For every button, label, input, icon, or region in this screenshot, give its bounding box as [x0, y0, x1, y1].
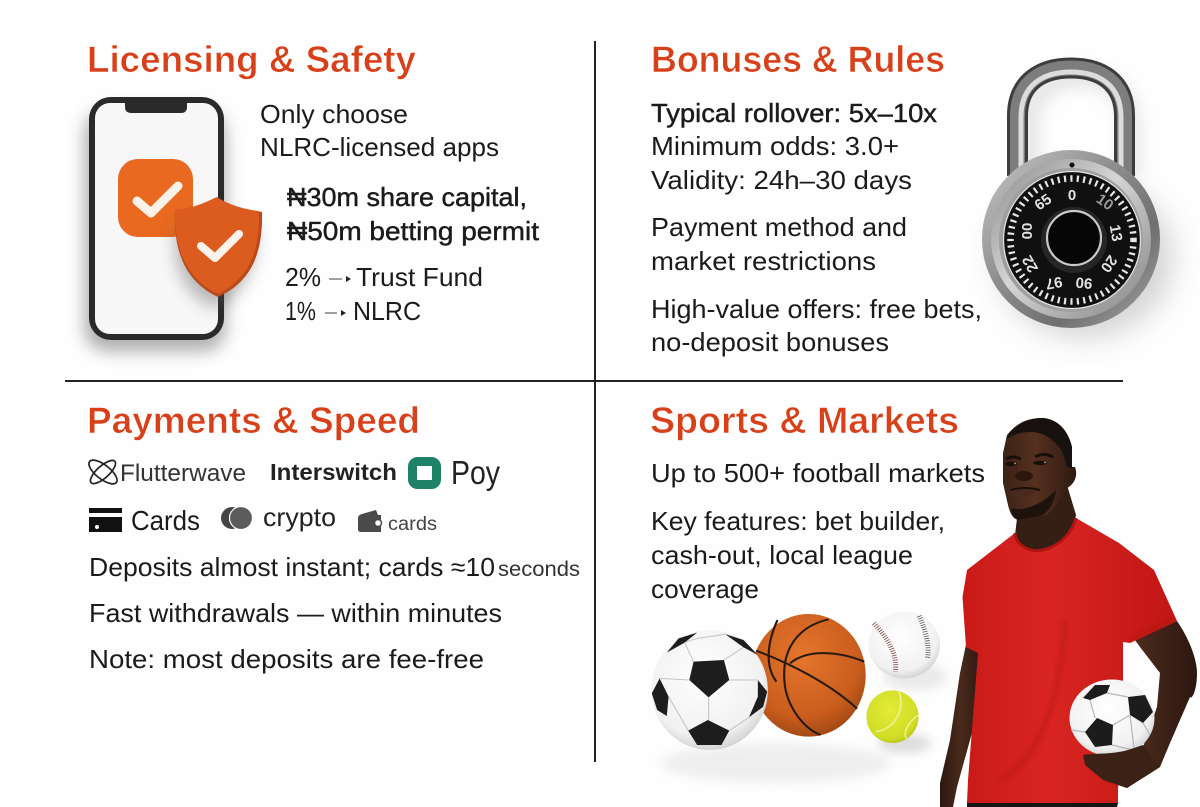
icon: credit card [89, 508, 122, 532]
icon: green square logo [412, 462, 436, 484]
icon: combination padlock: 22 [1019, 252, 1042, 275]
text: football markets: Up to 500+ football markets [651, 458, 985, 488]
text: deposit speed: seconds [498, 558, 580, 581]
icon: combination padlock: 13 [1106, 223, 1125, 243]
text: restrictions [651, 212, 907, 276]
logo row: payment providers: Poy [451, 454, 500, 491]
text: fee note: Note: most deposits are fee-free [89, 644, 484, 674]
text: fund percentages with arrows: NLRC [353, 296, 421, 326]
icon: combination padlock: 65 [1032, 191, 1055, 214]
icon: combination padlock: 00 [1019, 223, 1036, 239]
text: fund percentages with arrows: 1% [285, 296, 316, 326]
heading: payments and speed: Payments & Speed [87, 400, 420, 441]
logo row: cards and crypto [89, 502, 437, 536]
heading: sports and markets: Sports & Markets [650, 400, 959, 441]
text: fund percentages with arrows [285, 262, 483, 326]
icon: phone with orange check and shield [84, 97, 262, 352]
illustration: sports balls [651, 612, 947, 783]
panel: payments and speed [85, 400, 580, 674]
logo row: payment providers [85, 454, 500, 491]
text: capital requirements: ₦30m share capital, [287, 182, 527, 212]
text: key features [651, 506, 945, 604]
text: licensed apps [260, 99, 499, 162]
icon: combination padlock: 97 [1044, 273, 1064, 292]
icon: combination padlock: 0 [1068, 187, 1076, 204]
icon: wallet [358, 510, 382, 532]
collar [1015, 518, 1076, 551]
logo row: cards and crypto: cards [388, 514, 437, 535]
red t-shirt [962, 518, 1177, 803]
text: restrictions: Payment method and [651, 212, 907, 242]
text: key features: cash-out, local league [651, 540, 913, 570]
text: fund percentages with arrows: Trust Fund [356, 262, 483, 292]
panel: licensing and safety [84, 39, 540, 352]
vertical divider [594, 41, 596, 762]
panel: sports and markets [650, 400, 1197, 807]
heading: licensing and safety: Licensing & Safety [87, 39, 416, 80]
right arm [1083, 621, 1197, 788]
text: rollover, odds and validity [651, 98, 937, 195]
text: rollover, odds and validity: Typical rollover: 5x–10x [651, 98, 937, 128]
text: key features: coverage [651, 574, 759, 604]
text: rollover, odds and validity: Minimum odds: 3.0+ [651, 131, 899, 161]
icon: baseball [869, 612, 940, 678]
head [1003, 418, 1076, 520]
icon: overlapping circles [221, 506, 252, 530]
logo row: cards and crypto: Cards [131, 505, 200, 536]
panel: bonuses and rules [651, 39, 1173, 357]
left arm [940, 640, 982, 807]
text: capital requirements [287, 182, 540, 246]
hand [1083, 745, 1160, 788]
icon: combination padlock: 90 [1075, 273, 1093, 292]
horizontal divider [65, 380, 1123, 382]
text: fund percentages with arrows: 2% [285, 262, 321, 292]
shirt shading [1000, 620, 1172, 780]
icon: tennis ball [866, 690, 919, 743]
text: capital requirements: ₦50m betting permit [287, 216, 540, 246]
nose, mouth and beard [1011, 471, 1056, 520]
neck [1015, 485, 1076, 556]
icon: soccer ball [651, 630, 768, 750]
text: high-value offers [651, 294, 982, 357]
text: rollover, odds and validity: Validity: 24h–30 days [651, 165, 912, 195]
text: key features: Key features: bet builder, [651, 506, 945, 536]
logo row: payment providers: Flutterwave [120, 460, 246, 487]
text: restrictions: market restrictions [651, 246, 876, 276]
icon: basketball [751, 614, 866, 737]
heading: bonuses and rules: Bonuses & Rules [651, 39, 945, 80]
icon: combination padlock: 20 [1097, 252, 1120, 275]
football in hand [1070, 680, 1154, 756]
text: high-value offers: no-deposit bonuses [651, 327, 889, 357]
eyes and brows [1005, 454, 1053, 466]
text: withdrawals: Fast withdrawals — within minutes [89, 598, 502, 628]
logo row: cards and crypto: crypto [263, 502, 336, 532]
logo row: payment providers: Interswitch [270, 459, 397, 485]
text: deposit speed: Deposits almost instant; cards ≈10 [89, 552, 495, 582]
hair [1006, 418, 1072, 468]
icon: combination padlock: 10 [1093, 191, 1116, 214]
text: licensed apps: Only choose [260, 99, 408, 129]
text: licensed apps: NLRC-licensed apps [260, 132, 499, 162]
text: high-value offers: High-value offers: free bets, [651, 294, 982, 324]
shorts [967, 803, 1118, 807]
icon: combination padlock [982, 68, 1173, 338]
icon: flutterwave mark [85, 456, 121, 488]
illustration: man in red shirt holding a football [940, 418, 1197, 807]
